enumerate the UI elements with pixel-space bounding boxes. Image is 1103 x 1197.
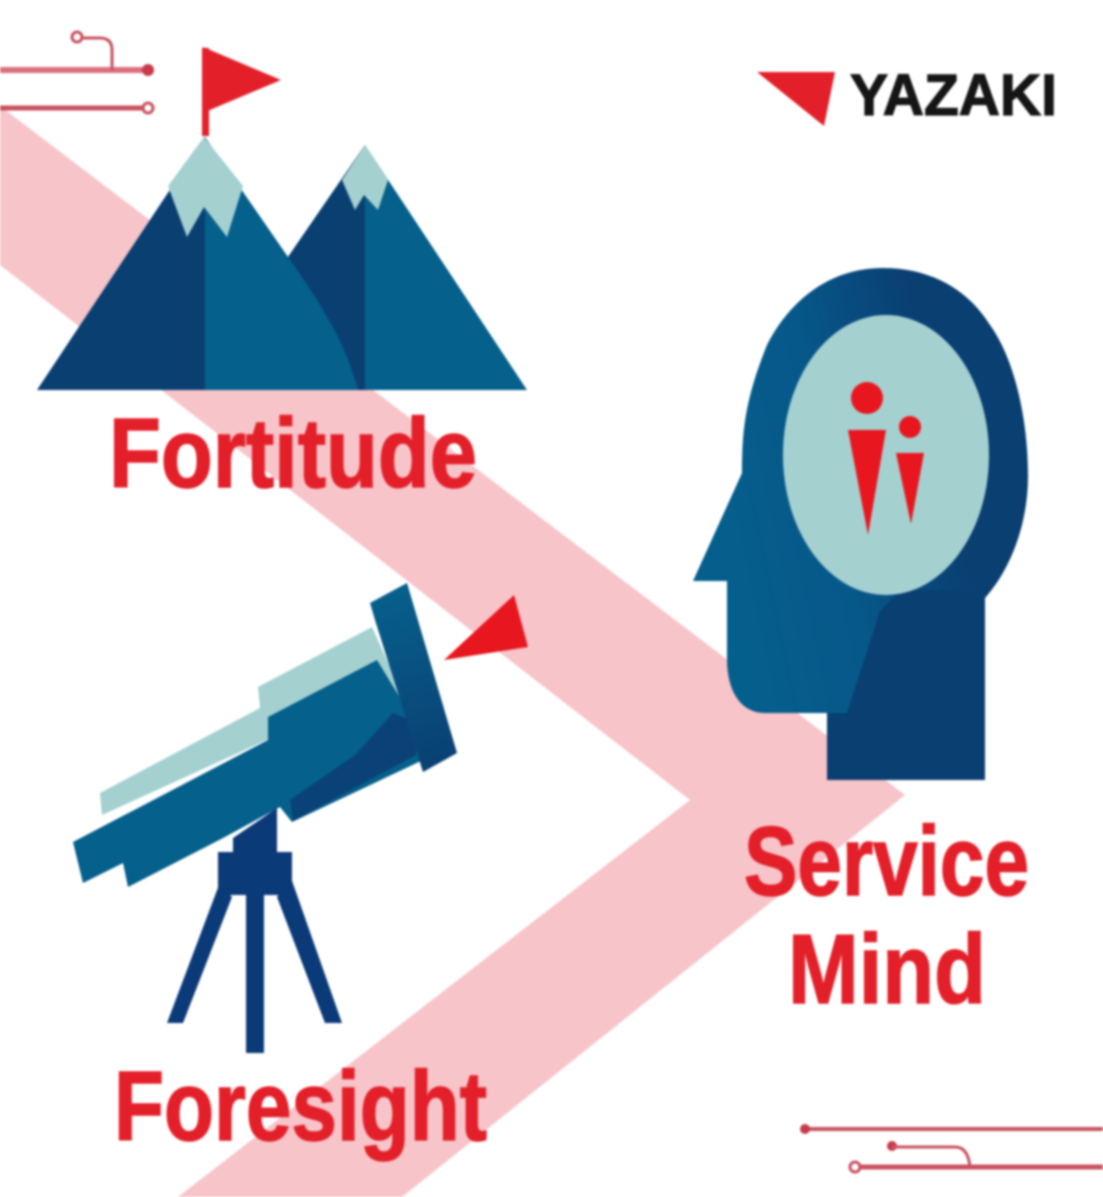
icon: red arrow triangle: [444, 595, 528, 660]
icon: telescope: [73, 583, 457, 1053]
pink chevron arrow band: [0, 106, 905, 1197]
heading: Service Mind: Mind: [788, 914, 986, 1024]
telescope mount and tripod: [167, 808, 342, 1053]
circuit lines: top left: [0, 32, 154, 113]
icon: red flag: [202, 47, 281, 136]
logo: Yazaki: YAZAKI: [850, 63, 1057, 128]
mountains icon: [37, 137, 527, 390]
heading: Service Mind: [744, 806, 1029, 1024]
heading: Fortitude: Fortitude: [109, 398, 477, 508]
heading: Foresight: Foresight: [114, 1051, 487, 1161]
logo: Yazaki: [757, 63, 1057, 128]
heading: Service Mind: Service: [744, 806, 1029, 916]
icon: two people: [848, 382, 924, 535]
icon: head with people: [693, 268, 1028, 780]
circuit lines: bottom right: [800, 1124, 1103, 1172]
